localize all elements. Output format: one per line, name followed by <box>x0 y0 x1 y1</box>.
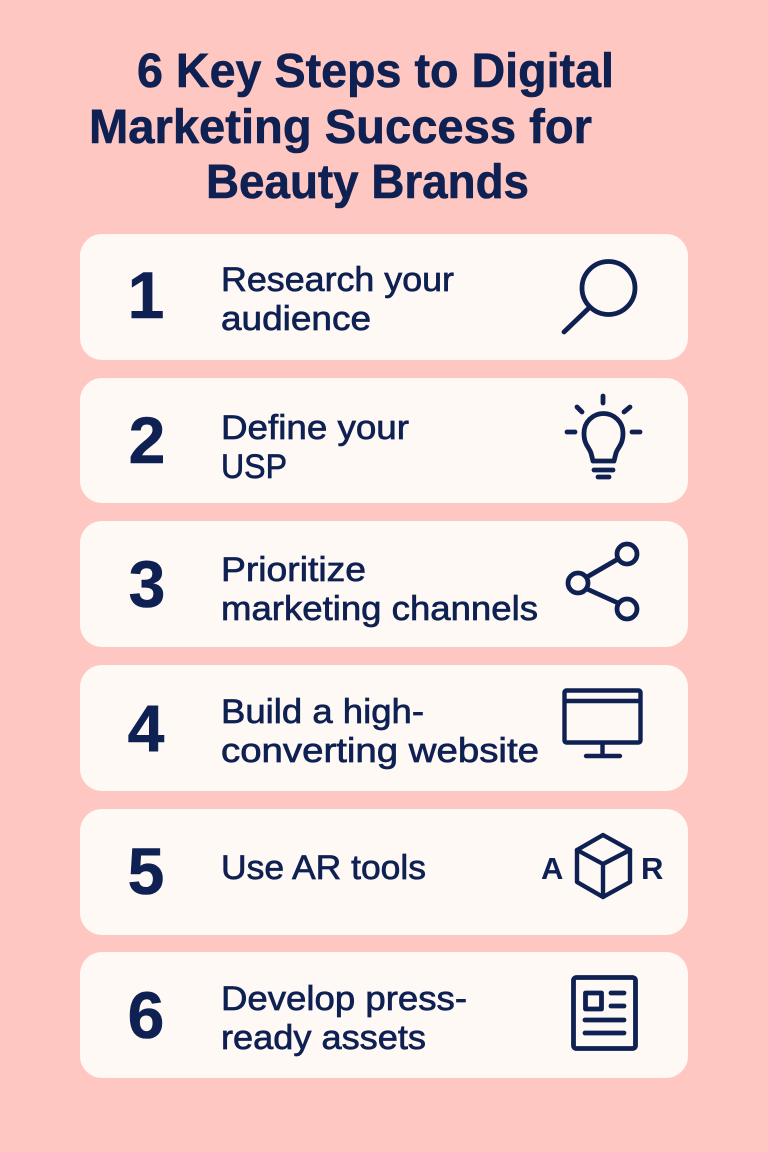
step text: build a high-converting website <box>221 693 539 770</box>
step text: prioritize marketing channels: Prioritize <box>221 551 366 589</box>
icon: AR cube <box>541 835 663 897</box>
step text: develop press-ready assets <box>221 980 467 1057</box>
step text: define your USP: Define your <box>221 409 409 447</box>
panel: step 6 <box>80 952 688 1078</box>
icon: magnifying glass <box>564 262 635 332</box>
icon: AR cube: R <box>641 851 663 886</box>
step text: define your USP: USP <box>221 448 287 486</box>
panel: step 5 <box>80 809 688 935</box>
step text: research your audience: audience <box>221 300 371 338</box>
title: 6 Key Steps to Digital <box>137 45 614 98</box>
step text: prioritize marketing channels: marketing channels <box>221 590 538 628</box>
step number 4: 4 <box>128 691 165 765</box>
step text: research your audience <box>221 261 454 338</box>
step text: prioritize marketing channels <box>221 551 538 628</box>
panel: step 1 <box>80 234 688 360</box>
step number 6: 6 <box>128 978 164 1052</box>
step text: build a high-converting website: converting website <box>221 732 539 770</box>
step number 3: 3 <box>129 547 165 621</box>
step number 2: 2 <box>129 403 165 477</box>
icon: press document <box>574 978 636 1048</box>
icon: share network <box>568 544 637 619</box>
icon: desktop monitor <box>564 690 640 756</box>
step text: use AR tools: Use AR tools <box>221 849 426 887</box>
step number 1: 1 <box>128 258 164 332</box>
title: Marketing Success for <box>89 101 592 154</box>
panel: step 4 <box>80 665 688 791</box>
icon: light bulb <box>567 396 640 477</box>
title: Beauty Brands <box>206 156 529 209</box>
step text: develop press-ready assets: Develop press- <box>221 980 467 1018</box>
step text: build a high-converting website: Build a high- <box>221 693 424 731</box>
title <box>89 45 614 209</box>
step number 5: 5 <box>128 834 164 908</box>
step text: research your audience: Research your <box>221 261 454 299</box>
icon: AR cube: A <box>541 851 563 886</box>
step text: develop press-ready assets: ready assets <box>221 1019 426 1057</box>
panel: step 3 <box>80 521 688 647</box>
step text: define your USP <box>221 409 409 486</box>
panel: step 2 <box>80 378 688 503</box>
